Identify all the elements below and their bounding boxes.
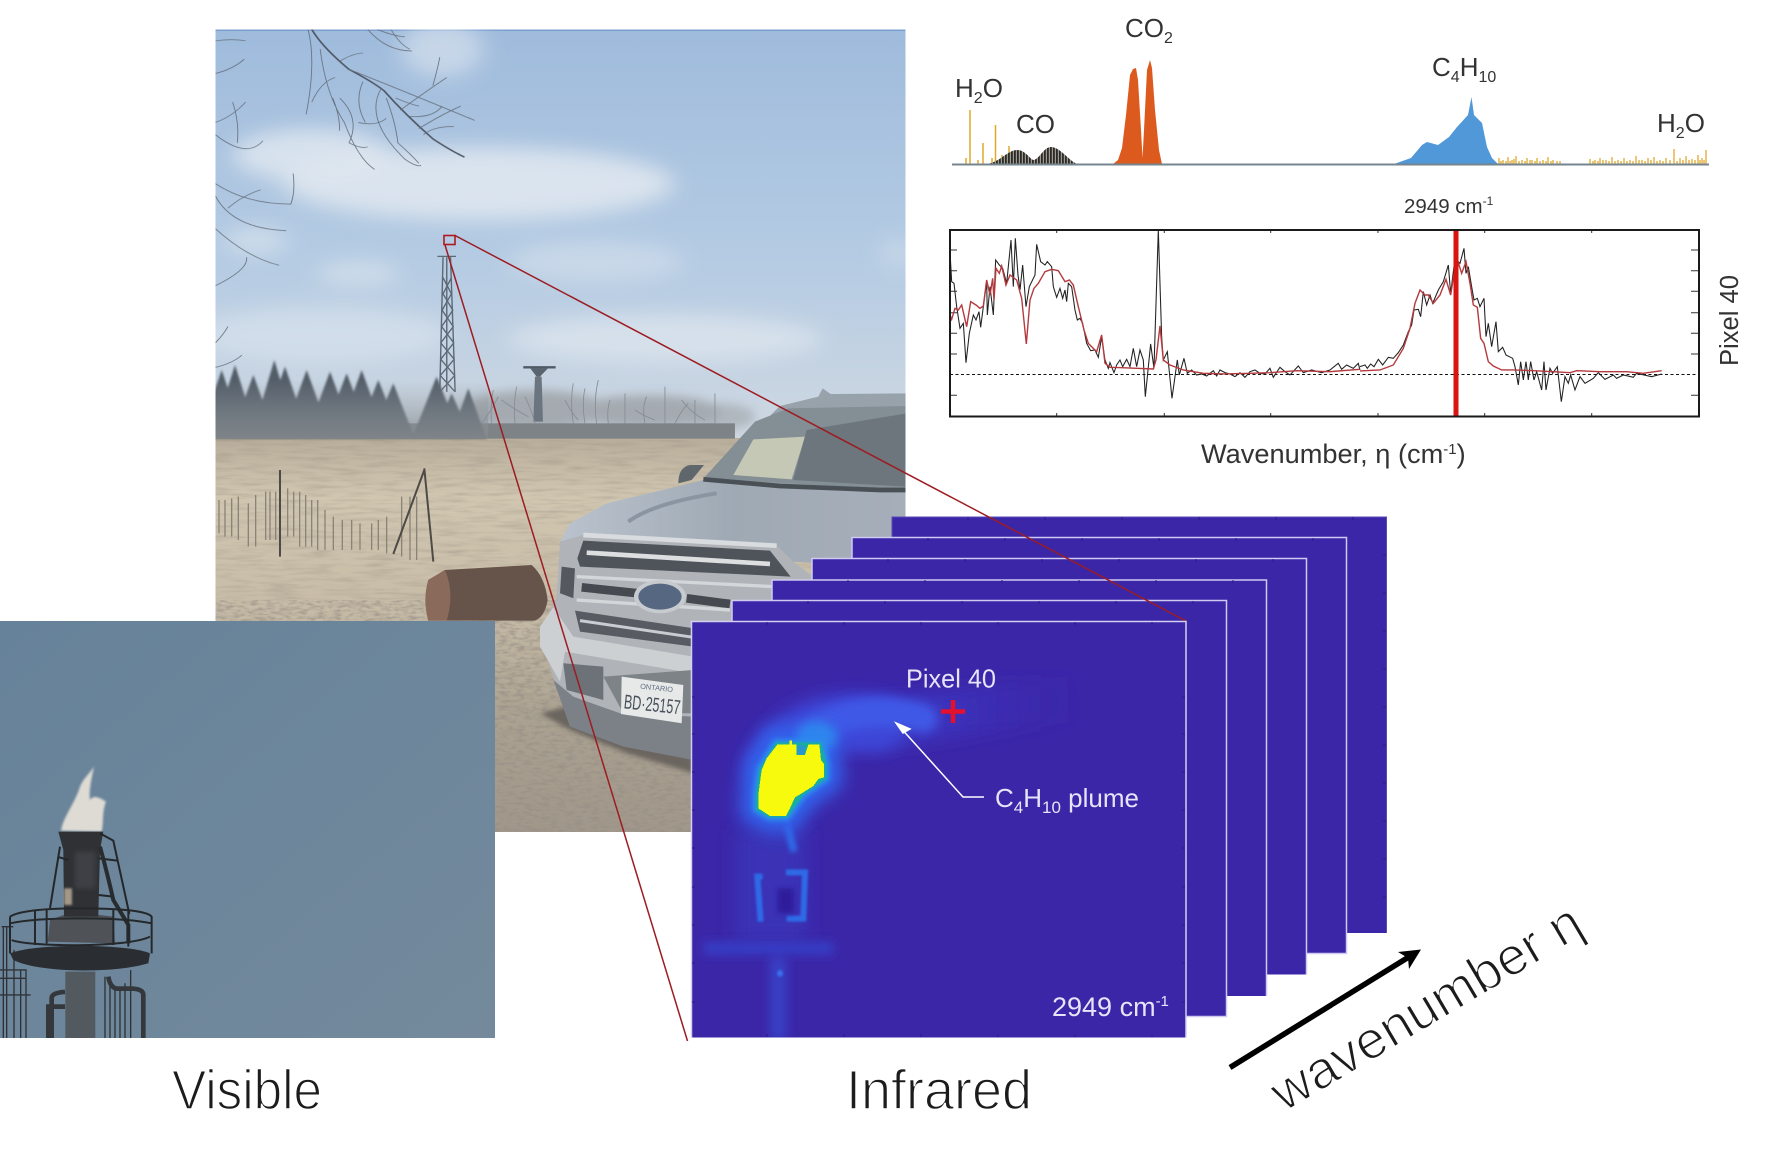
communication tower: [437, 256, 456, 392]
panel: field site photograph with truck: [191, 20, 917, 833]
hood: [559, 480, 907, 568]
sky: [215, 29, 906, 439]
heading: Infrared: Infrared: [846, 1058, 1032, 1121]
headlight: [560, 567, 575, 598]
tree branches: [216, 30, 475, 368]
lower grille: [575, 611, 693, 647]
panel: infrared frame at 2949 cm-1: [692, 622, 1186, 1040]
plume arc outer: [773, 722, 877, 767]
Ford badge: [634, 580, 686, 613]
label: C4H10 plume: plume: [1061, 783, 1139, 813]
heading: Visible: Visible: [172, 1058, 322, 1121]
second tower: [523, 367, 556, 422]
CO absorption band: [987, 147, 1077, 164]
C4H10 absorption band: [1394, 97, 1498, 164]
wipers: [703, 479, 907, 490]
frame outline and ticks: [692, 622, 1186, 1038]
stack of infrared frames: [732, 517, 1386, 1016]
label: C4H10: H: [1460, 52, 1478, 82]
vessel at deck: [48, 915, 115, 943]
frame 4: [812, 558, 1306, 974]
label: C4H10: 10: [1478, 69, 1496, 86]
frame 3: [772, 580, 1266, 996]
label: left H2O: H: [955, 73, 974, 103]
grass texture: [216, 440, 811, 652]
arrow: wavenumber direction: [1230, 950, 1421, 1068]
projection line to bottom left of frame: [445, 245, 688, 1041]
top edge line: [216, 30, 906, 31]
clouds: [191, 20, 917, 363]
fitted spectrum right: [1360, 257, 1662, 373]
frame background: [692, 622, 1186, 1038]
label: Pixel 40: Pixel 40: [906, 664, 996, 694]
axis label: wavenumber: ): [1457, 438, 1466, 469]
lower dry grass texture: [216, 600, 690, 822]
amber water lines left: [966, 110, 1009, 164]
neck below flame: [787, 823, 794, 852]
label: right H2O: H: [1657, 108, 1676, 138]
measured spectrum left: [950, 230, 1360, 398]
plume arc fading right: [840, 698, 1073, 725]
annotation arrow to plume: [896, 723, 984, 797]
ground under truck: [540, 707, 693, 773]
chart: molecular absorption reference spectra: [952, 13, 1709, 164]
panel: flare stack visible image: [0, 621, 495, 1038]
bare tree haze behind horizon: [462, 390, 755, 430]
red wavenumber marker line: [1454, 230, 1458, 417]
flare background sky: [0, 621, 495, 1038]
windshield: [703, 406, 907, 490]
measured spectrum right: [1360, 248, 1662, 402]
label: C4H10: 4: [1451, 69, 1460, 86]
label: left H2O: 2: [974, 90, 983, 107]
stack platform glow: [703, 931, 833, 965]
label: CO2: CO: [1125, 13, 1164, 43]
bumper: [540, 607, 693, 682]
zoom square on tower: [444, 236, 455, 244]
axis label: wavenumber: -1: [1443, 441, 1457, 458]
stack bracket shapes: [757, 877, 763, 922]
label: right H2O: 2: [1676, 125, 1685, 142]
faint column below flame: [735, 830, 807, 940]
red cross marker: [941, 700, 965, 723]
frame 6: [892, 517, 1386, 933]
see-through side glass: [733, 437, 805, 479]
label: left H2O: O: [983, 73, 1003, 103]
plume image: [703, 698, 1073, 1040]
projection line to top right of frame: [455, 236, 1186, 621]
chart frame: [950, 230, 1699, 416]
label: 2949 cm-1 on frame: 2949 cm: [1052, 992, 1156, 1022]
label: CO: CO: [1016, 109, 1055, 139]
fascia chrome: [548, 535, 812, 716]
white steam plume: [61, 767, 106, 832]
hot core halo: [758, 745, 824, 815]
stack: [58, 832, 103, 917]
wavenumber marker label: 2949 cm: [1404, 195, 1483, 218]
green rim: [758, 745, 824, 815]
fence: [219, 468, 433, 562]
yellow saturated core: [758, 741, 824, 816]
licence plate: ONTARIO: [640, 682, 674, 694]
label: C4H10 plume: C: [995, 783, 1014, 813]
label: right H2O: O: [1685, 108, 1705, 138]
lower valance: [553, 680, 693, 760]
licence plate: BD·25157: [623, 691, 681, 719]
rusty barrel: [425, 565, 548, 621]
fitted spectrum left: [950, 266, 1360, 374]
frame 2: [732, 600, 1226, 1016]
label: wavenumber eta: wavenumber η: [1259, 892, 1593, 1123]
platform deck: [10, 946, 150, 970]
axis ticks: [950, 230, 1699, 416]
mid grille slots: [582, 587, 730, 604]
label: C4H10: C: [1432, 52, 1451, 82]
side mirror: [678, 465, 704, 483]
wavenumber marker label: -1: [1483, 194, 1494, 208]
tree line: [198, 360, 735, 439]
zero dashed line: [950, 374, 1699, 376]
railing: [10, 908, 152, 953]
lower stack glow: [753, 957, 803, 1040]
field: [216, 438, 812, 832]
notch in core: [797, 745, 805, 755]
red zoom marker and projection lines: [444, 236, 1186, 1041]
lower column: [65, 972, 95, 1038]
cab roof: [756, 388, 906, 486]
upper grille: [577, 541, 791, 577]
label: C4H10 plume: 10: [1042, 798, 1061, 817]
label: C4H10 plume: H: [1023, 783, 1042, 813]
licence plate: [621, 677, 683, 723]
support cage: [50, 833, 129, 914]
label: 2949 cm-1 on frame: -1: [1156, 993, 1169, 1010]
baseline: [952, 164, 1709, 166]
axis label: wavenumber: Wavenumber, η (cm: [1201, 438, 1443, 469]
amber water lines right: [1499, 149, 1706, 164]
ladder and wires: [0, 927, 131, 1038]
curved pipes: [48, 977, 143, 1038]
truck: [540, 388, 907, 773]
label: C4H10 plume: 4: [1014, 798, 1023, 817]
label: CO2: 2: [1164, 30, 1173, 47]
plume arc inner: [805, 712, 923, 738]
CO2 absorption band: [1113, 60, 1162, 164]
frame 5: [852, 538, 1346, 954]
chart: pixel 40 measured and fitted spectrum: [950, 194, 1744, 469]
axis label: Pixel 40: Pixel 40: [1716, 275, 1744, 366]
